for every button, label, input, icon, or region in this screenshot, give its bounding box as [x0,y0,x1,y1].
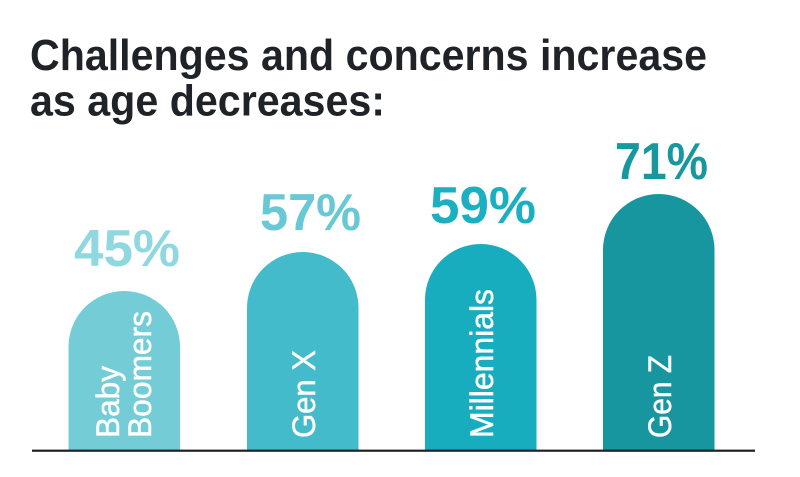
bar: Baby Boomers: 45% [74,220,180,278]
bar: Baby Boomers [68,220,180,450]
bar: Baby Boomers: Boomers [122,311,158,438]
bar: Millennials [425,177,537,450]
bar: Gen X [247,184,361,450]
bar: Gen X: Gen X [286,350,322,438]
bar chart [32,133,755,452]
axis baseline [32,450,755,452]
bar: Gen X: 57% [260,184,361,242]
bar: Gen Z: 71% [615,133,708,191]
bar: Gen Z [603,133,715,450]
title: as age decreases: [30,76,385,126]
bar: Gen Z: Gen Z [642,355,678,438]
title: Challenges and concerns increase [30,31,707,80]
bar: Millennials: Millennials [464,289,500,438]
title [30,31,707,126]
bar: Millennials: 59% [430,177,536,235]
bar: Baby Boomers: Baby [90,366,126,438]
